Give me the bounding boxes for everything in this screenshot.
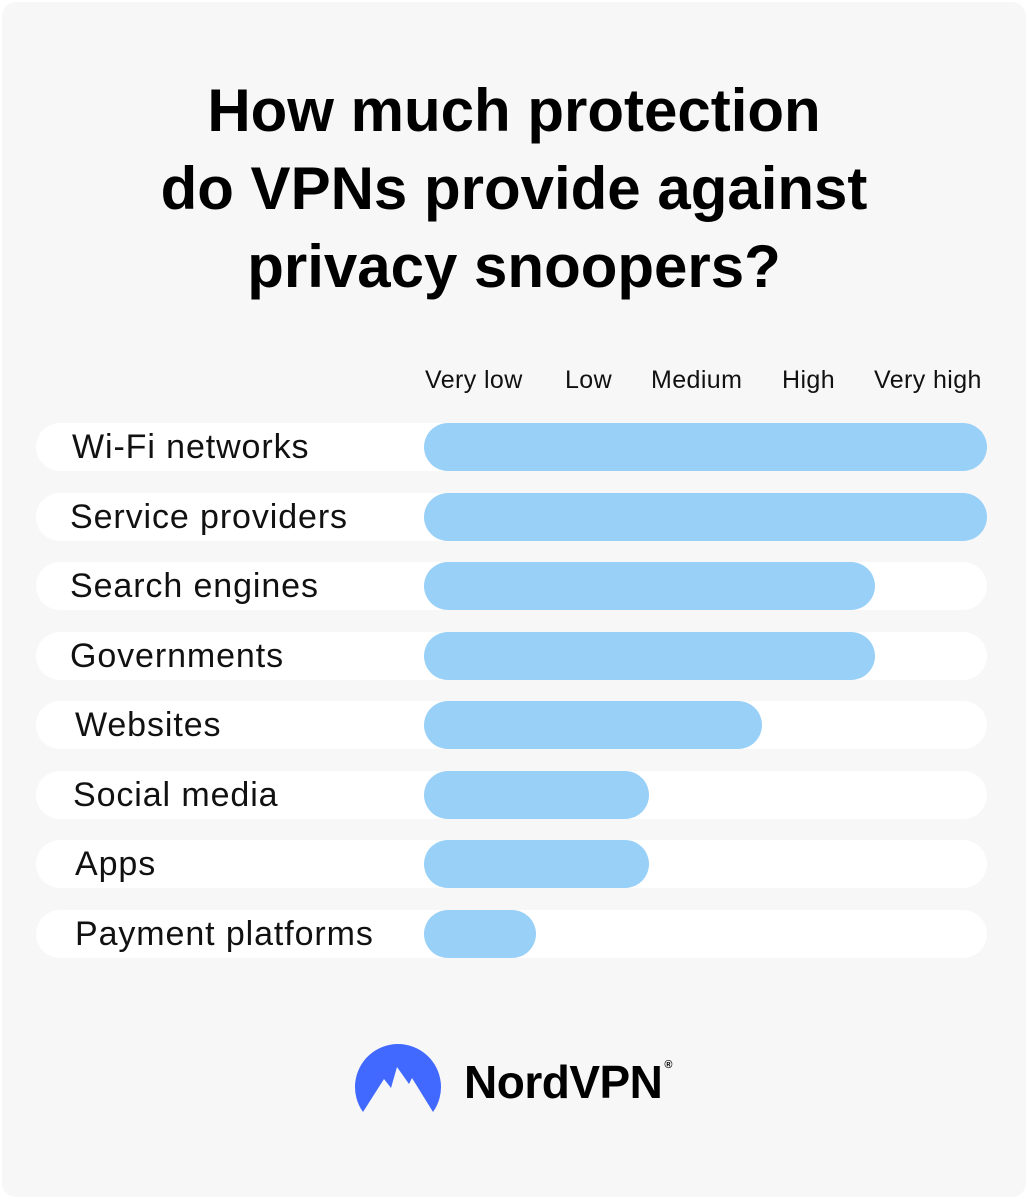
axis labels [425,366,982,394]
row: Governments: Governments [70,637,284,675]
row: Wi-Fi networks: Wi-Fi networks [72,428,309,466]
row: Governments [36,632,987,680]
axis labels: Very low [425,366,523,394]
row: Social media [36,771,987,819]
axis labels: Medium [651,366,742,394]
logo: NordVPN [355,1044,672,1112]
title: How much protection [207,77,821,144]
row: Service providers [36,493,987,541]
row: Websites: Websites [75,706,221,744]
row: Payment platforms [36,910,987,958]
title [161,77,867,300]
axis labels: Very high [874,366,982,394]
axis labels: Low [565,366,612,394]
row: Payment platforms: Payment platforms [75,915,374,953]
axis labels: High [782,366,835,394]
icon: mountain circle [355,1044,441,1112]
row: Wi-Fi networks [36,423,987,471]
row: Social media: Social media [73,776,278,814]
row: Websites [36,701,987,749]
row: Service providers: Service providers [70,498,348,536]
row: Search engines [36,562,987,610]
title: privacy snoopers? [247,233,781,300]
row: Apps: Apps [75,845,156,883]
row: Apps [36,840,987,888]
wordmark: NordVPN® [464,1056,672,1108]
row: Search engines: Search engines [70,567,319,605]
title: do VPNs provide against [161,155,867,222]
